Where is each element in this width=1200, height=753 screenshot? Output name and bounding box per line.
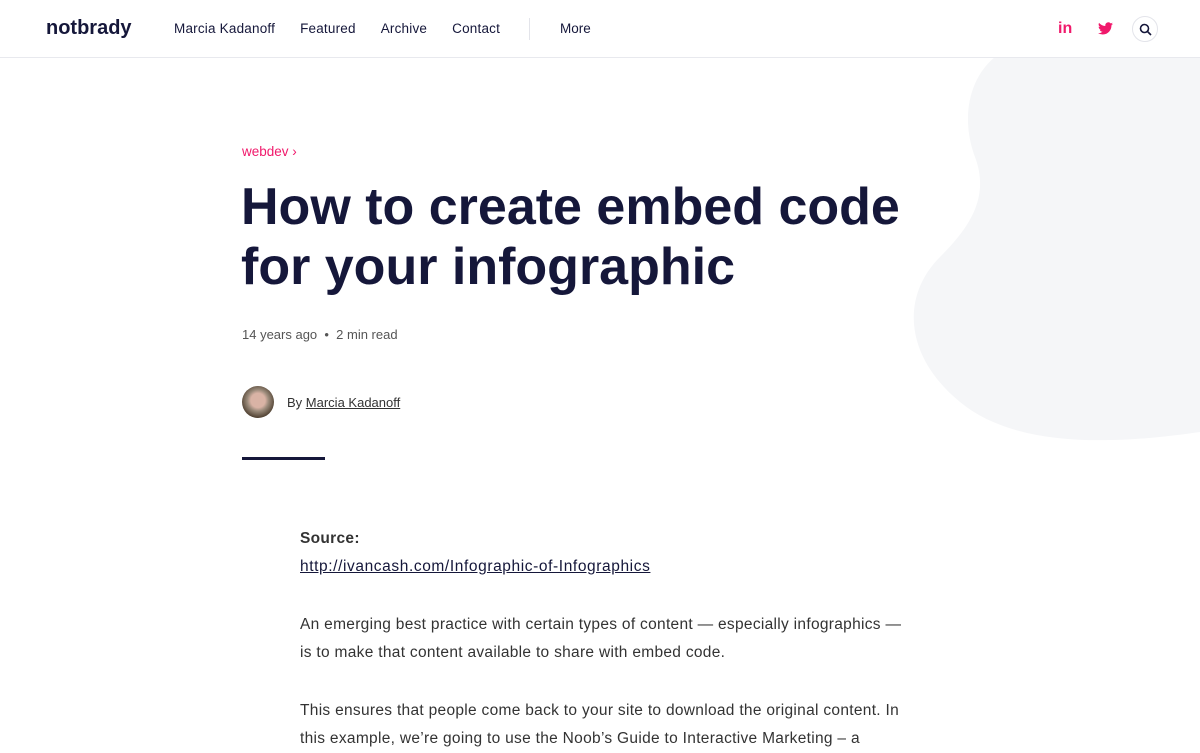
background blob	[914, 58, 1200, 440]
body text: http://ivancash.com/Infographic-of-Infographics	[300, 558, 650, 575]
header	[0, 0, 1200, 58]
body text: An emerging best practice with certain types of content — especially infographics —	[300, 616, 901, 633]
body text: Source:	[300, 530, 360, 547]
more menu: More	[560, 21, 591, 36]
logo: notbrady	[46, 17, 132, 39]
body text	[300, 530, 901, 747]
title: How to create embed code	[241, 178, 900, 236]
title	[241, 178, 900, 296]
nav: Marcia Kadanoff Featured Archive Contact	[174, 21, 500, 36]
avatar	[242, 386, 274, 418]
body text: this example, we’re going to use the Noob’s Guide to Interactive Marketing – a	[300, 730, 860, 747]
author	[242, 386, 400, 418]
icon: linkedin: in	[1058, 20, 1072, 37]
body text: is to make that content available to share with embed code.	[300, 644, 725, 661]
body text: This ensures that people come back to your site to download the original content. In	[300, 702, 899, 719]
tag: webdev ›	[242, 144, 297, 159]
icon: twitter	[1098, 22, 1113, 34]
byline: By Marcia Kadanoff	[287, 395, 400, 410]
title: for your infographic	[241, 238, 735, 296]
meta: 14 years ago • 2 min read	[242, 327, 398, 342]
icon: search	[1132, 16, 1158, 42]
